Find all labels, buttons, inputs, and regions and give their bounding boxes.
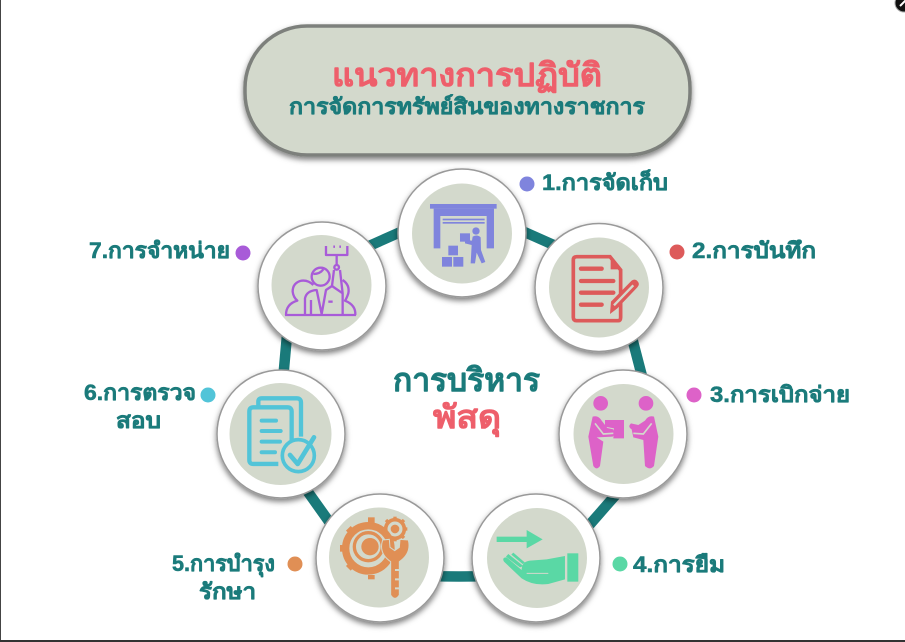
center label: พัสดุ (433, 399, 501, 438)
title: แนวทางการปฏิบัติ (332, 57, 602, 93)
node 5: maintenance (316, 494, 444, 622)
title panel (245, 26, 690, 155)
node 6: inspection (217, 370, 345, 498)
label 6: 6.การตรวจ (84, 380, 196, 405)
icon: document with pen (573, 257, 639, 321)
label 6: สอบ (116, 408, 161, 433)
icon: warehouse (430, 204, 497, 267)
center label: การบริหาร (393, 362, 540, 398)
label 3: 3.การเบิกจ่าย (710, 382, 850, 407)
label 4: 4.การยืม (633, 552, 725, 577)
label 6 (84, 380, 216, 433)
node 2: records (535, 224, 663, 352)
label 7: 7.การจำหน่าย (89, 238, 230, 263)
label 5: รักษา (199, 579, 256, 604)
subtitle: การจัดการทรัพย์สินของทางราชการ (289, 94, 645, 119)
label 1: 1.การจัดเก็บ (542, 168, 668, 195)
center label (393, 362, 540, 438)
icon: gears and wrench (340, 517, 409, 598)
label 5 (172, 551, 302, 604)
node 4: borrowing (472, 494, 600, 622)
icon: hand receiving with arrow (497, 530, 578, 584)
node 3: disbursement (559, 370, 687, 498)
node 1: storage (398, 169, 526, 297)
label 5: 5.การบำรุง (172, 551, 275, 578)
icon: window close button (895, 0, 905, 12)
icon: two people exchanging a box (588, 396, 658, 468)
icon: checked documents (249, 398, 314, 472)
icon: bidder raising paddle in crowd (285, 246, 356, 315)
node 7: disposal (258, 222, 386, 350)
label 2: 2.การบันทึก (692, 238, 816, 263)
connecting ring (283, 230, 643, 576)
